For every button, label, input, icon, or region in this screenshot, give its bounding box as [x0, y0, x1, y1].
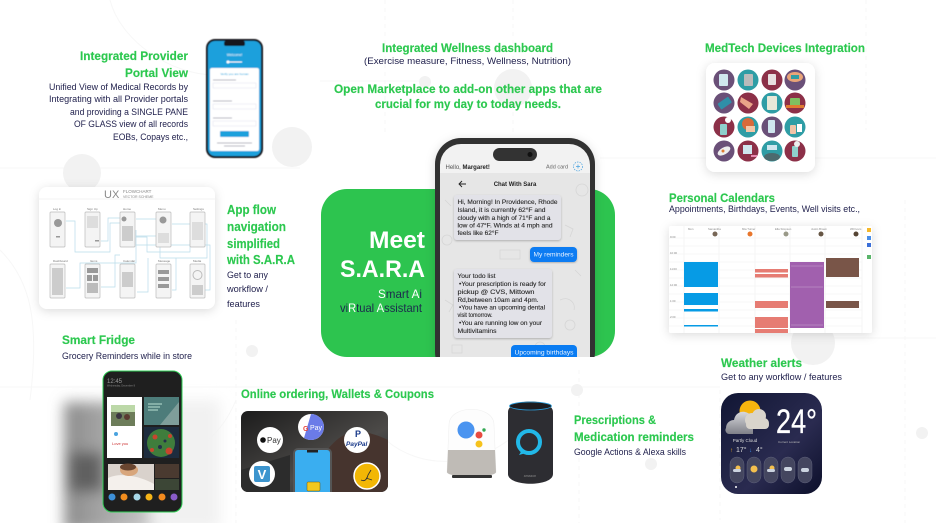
bubble: weather message: low of 47°F. Winds at 4 mph and [458, 224, 552, 230]
panel: calendar: 9:00 [670, 235, 676, 239]
text block: provider portal description: Integrating with all Provider portals [49, 94, 188, 104]
icon: venmo: V [258, 467, 267, 482]
icon: amazon echo speaker: amazon [524, 474, 536, 478]
bubble: todo list: Multivitamins [458, 329, 496, 335]
text block: provider portal description: EOBs, Copays etc., [113, 132, 188, 142]
text block: smart ai virtual assistant: viRtual Assistant [340, 301, 423, 315]
heading: open marketplace [334, 82, 602, 111]
icon: apple pay [257, 427, 283, 453]
panel: ux flowchart: Calendar [123, 259, 135, 263]
panel: ux flowchart: VECTOR SCHEME [123, 195, 154, 199]
heading: app flow navigation [226, 202, 296, 267]
panel: smart fridge screen [103, 371, 182, 512]
bubble: todo list [454, 269, 552, 338]
header greeting: Add card [546, 164, 568, 170]
heading: personal calendars: Personal Calendars [669, 191, 775, 205]
panel: medtech device icons [706, 63, 815, 172]
heading: meet sara: Meet [369, 227, 425, 254]
panel: calendar: 12:00 [670, 283, 677, 287]
heading: online ordering: Online ordering, Wallets & Coupons [241, 387, 434, 401]
panel: ux flowchart: Items [90, 259, 98, 263]
icon: google pay [298, 414, 324, 440]
bubble: my reminders: My reminders [534, 252, 574, 258]
tile: teal note [144, 397, 179, 425]
panel: weather widget [721, 393, 822, 494]
icon: sun and cloud [725, 400, 769, 434]
bubble: weather message: Island, it is currently 62°F and [458, 208, 546, 214]
tile: salad [144, 427, 179, 458]
panel: weather widget: Current Location [778, 440, 801, 444]
text block: wellness detail: (Exercise measure, Fitness, Wellness, Nutrition) [364, 56, 571, 67]
heading: prescriptions and medication reminders: Prescriptions & [574, 413, 656, 427]
forecast pills [730, 457, 812, 483]
icon: paypal: PayPal [346, 441, 368, 448]
high and low: ↑ [730, 448, 733, 454]
text block: weather detail: Get to any workflow / features [721, 372, 842, 382]
text block: app flow description [226, 270, 269, 309]
text block: provider portal description: and providing a SINGLE PANE [70, 107, 188, 117]
panel: wallets and payments [241, 411, 388, 492]
panel: ux flowchart: Dashboard [53, 259, 68, 263]
bubble: todo list: •You are running low on your [459, 321, 542, 327]
panel: ux flowchart: Sign Up [87, 207, 98, 211]
text block: fridge detail: Grocery Reminders while in store [62, 351, 192, 361]
tile: family note: Love you [112, 441, 128, 446]
device glyphs [716, 72, 804, 161]
heading: prescriptions and medication reminders [574, 413, 694, 444]
icon: paypal [344, 427, 370, 453]
icon: google pay: Pay [310, 425, 323, 432]
heading: weather alerts: Weather alerts [721, 356, 802, 370]
panel: ux flowchart: Log in [53, 207, 62, 211]
image: blurred fridge [64, 400, 220, 523]
heading: medtech devices integration: MedTech Devices Integration [705, 41, 865, 55]
panel: ux flowchart: Home [123, 207, 131, 211]
bubble: todo list: visit tomorrow. [458, 313, 493, 319]
heading: integrated provider portal view [80, 49, 189, 80]
icon: provider portal phone [206, 39, 263, 158]
chart: flow connector lines [66, 218, 210, 292]
bubble: upcoming birthdays: Upcoming birthdays [514, 350, 574, 356]
icon: apple pay: Pay [267, 436, 281, 445]
bubble: todo list: Your todo list [458, 274, 496, 280]
panel: ux flowchart: UX [104, 189, 120, 201]
heading: prescriptions and medication reminders: Medication reminders [574, 430, 694, 444]
bubble: upcoming birthdays [511, 345, 577, 357]
temperature: 24° [776, 403, 817, 441]
panel: smart fridge screen: 12:45 [107, 379, 123, 385]
phone with wallet [293, 448, 332, 492]
bubble: weather message: feels like 62°F [458, 231, 499, 237]
text block: provider portal description [49, 82, 188, 142]
bubble: weather message [454, 195, 561, 240]
heading: open marketplace: Open Marketplace to add-on other apps that are [334, 82, 602, 96]
high and low: ↓ [749, 448, 752, 454]
heading: app flow navigation: navigation [227, 219, 286, 234]
text block: calendar detail: Appointments, Birthdays, Events, Well visits etc., [669, 204, 860, 214]
high and low: 17° [736, 446, 747, 454]
panel: calendar: 11:00 [670, 267, 677, 271]
panel: calendar: Justin Brown [811, 227, 827, 231]
heading: app flow navigation: with S.A.R.A [226, 252, 296, 267]
text block: smart ai virtual assistant [340, 287, 423, 315]
tile: family note [107, 397, 142, 458]
chart: wireframe screens [50, 212, 205, 298]
bubble: todo list: pickup @ CVS, Mittown [458, 290, 534, 296]
panel: calendar: 1:00 [670, 299, 676, 303]
bubble: weather message: cloudy with a high of 71°F and a [458, 216, 551, 222]
heading: app flow navigation: App flow [227, 202, 277, 217]
panel: ux flowchart: Media [193, 259, 202, 263]
phone: chat with sara [435, 138, 595, 378]
heading: app flow navigation: simplified [227, 236, 280, 251]
heading: meet sara: S.A.R.A [340, 256, 425, 283]
icon: provider portal phone: Verify you are human [220, 72, 249, 76]
app dock [108, 494, 178, 500]
icon: paypal: P [355, 429, 361, 439]
text block: provider portal description: OF GLASS view of all records [74, 119, 188, 129]
heading: smart fridge: Smart Fridge [62, 333, 135, 347]
text block: smart ai virtual assistant: Smart Ai [378, 287, 422, 301]
panel: calendar: Will Ivers [850, 227, 862, 231]
icon: venmo [249, 461, 275, 487]
panel: ux flowchart [39, 187, 215, 309]
panel: ux flowchart: FLOWCHART [123, 189, 152, 194]
heading: integrated provider portal view: Portal View [125, 66, 189, 80]
header greeting: Hello, Margaret! [446, 165, 490, 171]
panel: smart fridge screen: Wednesday, December 8 [107, 384, 136, 388]
bubble: weather message: Hi, Morning! In Providence, Rhode [458, 200, 558, 206]
panel: calendar: Ella Simpson [775, 227, 792, 231]
text block: provider portal description: Unified View of Medical Records by [49, 82, 188, 92]
heading: meet sara [340, 227, 425, 283]
icon: google home speaker [447, 409, 496, 478]
icon: coupon token [354, 463, 380, 489]
icon: google pay: G [303, 426, 309, 433]
bubble: my reminders [530, 247, 577, 262]
bubble: todo list: Rd,between 10am and 4pm. [458, 298, 539, 304]
panel: calendar: 2:00 [670, 315, 676, 319]
bubble: todo list: •You have an upcoming dental [459, 306, 545, 312]
header greeting [446, 162, 582, 171]
panel: calendar [669, 226, 872, 333]
heading: integrated wellness dashboard: Integrated Wellness dashboard [382, 41, 553, 55]
panel: calendar: Samantha [708, 227, 721, 231]
calendar events [684, 258, 859, 333]
panel: ux flowchart: Message [158, 259, 171, 263]
icon: provider portal phone: Welcome! [227, 53, 242, 57]
chat title [459, 181, 537, 188]
text block: app flow description: features [227, 299, 260, 309]
heading: open marketplace: crucial for my day to today needs. [375, 97, 561, 111]
panel: calendar: Mia Turner [742, 227, 755, 231]
panel: calendar: Mon [688, 227, 694, 231]
bubble: todo list: •Your prescription is ready for [459, 282, 546, 288]
text block: google actions and alexa skills: Google Actions & Alexa skills [574, 447, 686, 457]
panel: ux flowchart: Settings [193, 207, 204, 211]
high and low [730, 446, 763, 454]
panel: ux flowchart: Menu [158, 207, 166, 211]
heading: integrated provider portal view: Integrated Provider [80, 49, 188, 63]
text block: app flow description: workflow / [226, 284, 269, 294]
panel: weather widget: Partly Cloud [733, 438, 758, 443]
icon: amazon echo speaker [508, 402, 553, 484]
chat title: Chat With Sara [494, 182, 537, 188]
tile: sleeping baby photo [108, 464, 179, 490]
panel: calendar: 10:00 [670, 251, 677, 255]
panel: meet sara [321, 138, 615, 378]
high and low: 4° [756, 446, 763, 454]
text block: app flow description: Get to any [227, 270, 268, 280]
